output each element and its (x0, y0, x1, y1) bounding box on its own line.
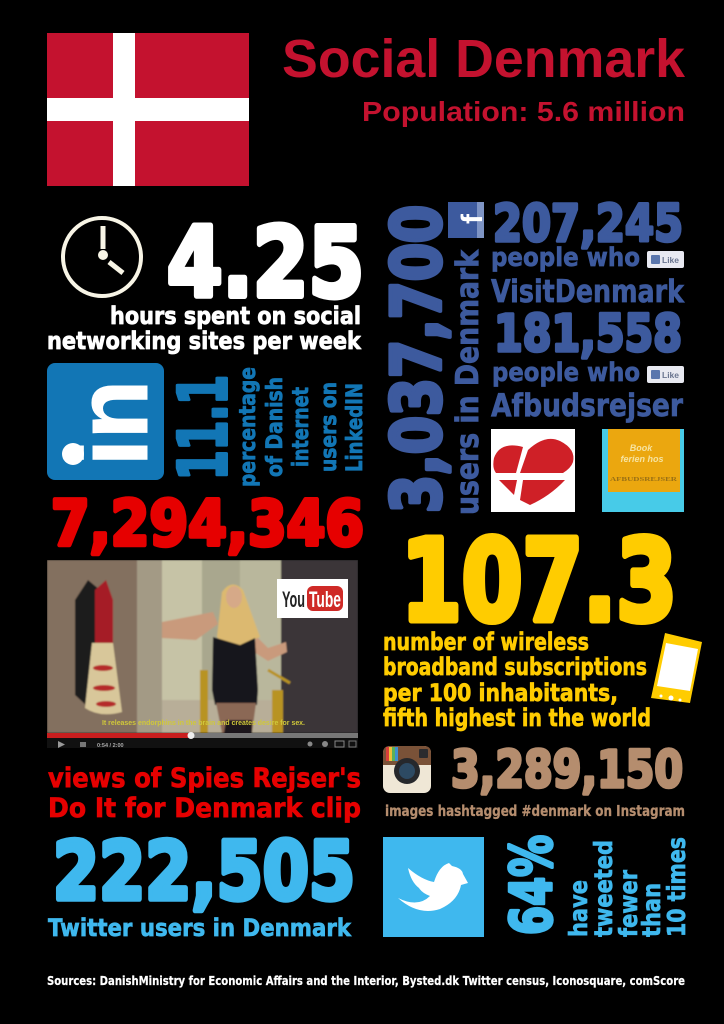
title: Social Denmark (282, 29, 686, 89)
wireless caption (383, 628, 651, 732)
Danish flag (47, 33, 249, 186)
tweet caption (564, 837, 691, 937)
tweet caption: tweeted (589, 840, 618, 937)
video caption: Do It for Denmark clip (48, 793, 361, 824)
hours caption: networking sites per week (47, 327, 362, 355)
hours stat: 4.25 (167, 207, 364, 319)
LinkedIn caption: percentage (236, 367, 261, 487)
wireless caption: fifth highest in the world (383, 704, 651, 732)
population subtitle: Population: 5.6 million (362, 96, 685, 127)
Afbudsrejser likes stat: 181,558 (494, 305, 682, 364)
icon: like button (647, 251, 684, 268)
icon: clock (63, 218, 141, 296)
hours caption: hours spent on social (110, 302, 361, 330)
tweet caption: have (564, 880, 593, 937)
Twitter users stat: 222,505 (53, 825, 355, 918)
people who: people who (491, 243, 640, 273)
Facebook users stat: 3,037,700 (378, 205, 457, 513)
icon: Twitter (383, 837, 484, 937)
wireless caption: per 100 inhabitants, (383, 679, 618, 707)
LinkedIn caption: internet (289, 387, 314, 467)
wireless caption: number of wireless (383, 628, 589, 656)
Afbudsrejser logo (602, 429, 684, 512)
video caption (48, 763, 361, 824)
Afbudsrejser logo: Book (630, 443, 653, 453)
icon: Facebook (448, 202, 489, 238)
video still (47, 560, 358, 749)
LinkedIn stat: 11.1 (165, 375, 242, 480)
LinkedIn caption: users on (317, 382, 342, 472)
icon: LinkedIn: in (55, 380, 169, 466)
tweet caption: 10 times (662, 837, 691, 937)
Facebook users caption: users in Denmark (450, 249, 486, 515)
video caption: views of Spies Rejser's (48, 763, 361, 794)
tweet stat: 64% (499, 835, 565, 935)
icon: YouTube: You (282, 587, 305, 612)
Afbudsrejser: Afbudsrejser (491, 388, 684, 424)
video views stat: 7,294,346 (51, 487, 364, 560)
video still: 0:54 / 2:00 (97, 743, 124, 749)
Twitter users caption: Twitter users in Denmark (48, 914, 352, 942)
icon: smartphone (651, 633, 702, 703)
video subtitle: It releases endorphins in the brain and creates desire for sex. (102, 718, 305, 727)
people who: people who (492, 358, 640, 388)
icon: like button (647, 366, 684, 383)
LinkedIn caption: of Danish (263, 377, 288, 477)
icon: like button: Like (662, 370, 679, 380)
icon: YouTube (277, 579, 348, 618)
Afbudsrejser logo: ferien hos (620, 454, 664, 464)
wireless caption: broadband subscriptions (383, 653, 647, 681)
icon: Instagram (383, 746, 431, 793)
hours caption (47, 302, 362, 355)
Afbudsrejser logo: AFBUDSREJSER (610, 476, 677, 483)
LinkedIn caption: LinkedIN (343, 383, 368, 472)
tweet caption: fewer (614, 869, 643, 937)
icon: YouTube: Tube (309, 587, 341, 612)
icon: like button: Like (662, 255, 679, 265)
tweet caption: than (637, 883, 666, 937)
VisitDenmark heart logo (491, 429, 575, 512)
VisitDenmark: VisitDenmark (491, 274, 685, 310)
icon: Facebook: f (456, 213, 489, 224)
LinkedIn caption (236, 367, 368, 487)
VisitDenmark likes stat: 207,245 (493, 195, 683, 254)
